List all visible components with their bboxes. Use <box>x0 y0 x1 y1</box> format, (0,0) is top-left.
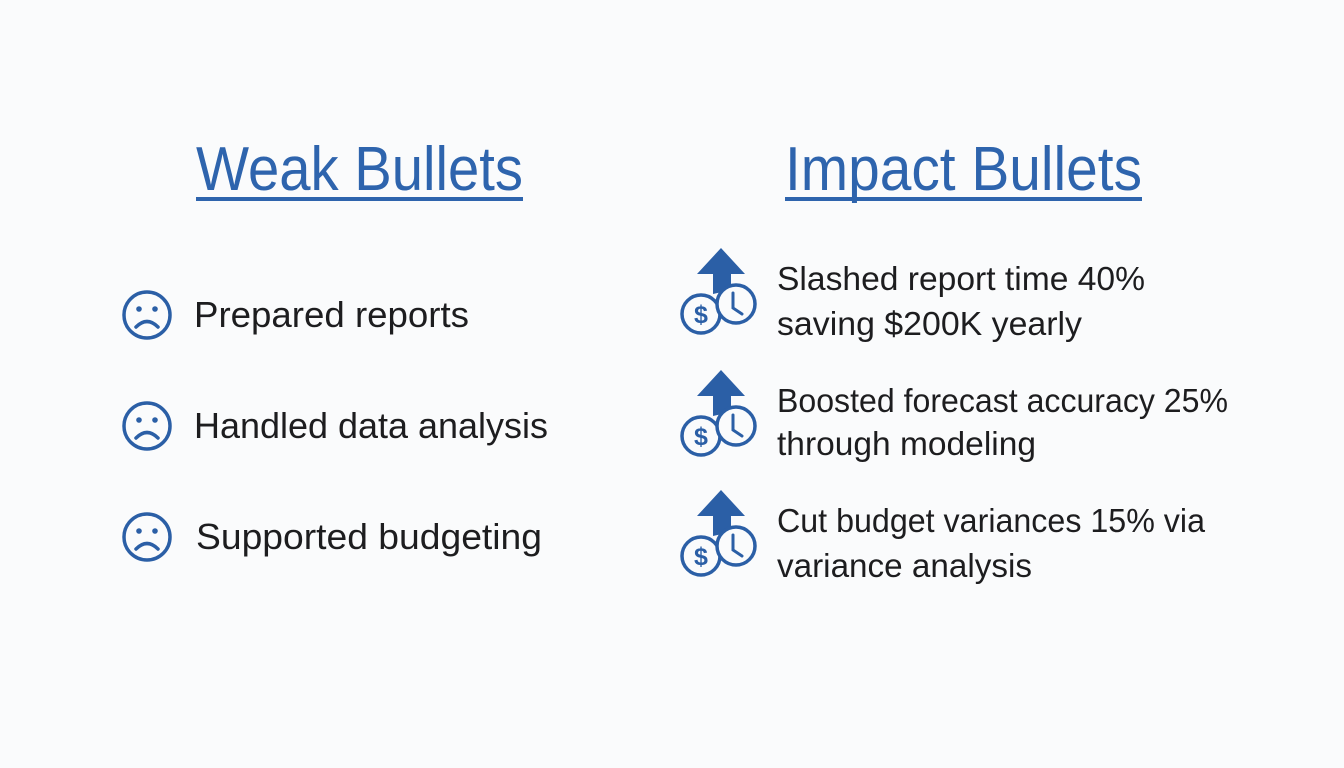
impact bullet 1: saving $200K yearly <box>777 305 1083 342</box>
impact bullet 2: Boosted forecast accuracy 25% <box>777 382 1228 419</box>
impact bullet 3: variance analysis <box>777 547 1032 584</box>
impact bullet 3: Cut budget variances 15% via <box>777 502 1206 539</box>
weak bullet 3: Supported budgeting <box>196 516 542 557</box>
impact bullet 2: through modeling <box>777 425 1036 462</box>
impact bullet 2 <box>682 370 1228 462</box>
impact bullet 3 <box>682 490 1206 584</box>
impact bullet 1: Slashed report time 40% <box>777 260 1145 297</box>
title: Impact Bullets: Impact Bullets <box>785 135 1142 204</box>
weak bullet 2: Handled data analysis <box>194 405 548 446</box>
title: Weak Bullets: Weak Bullets <box>196 135 523 204</box>
weak bullet 1: Prepared reports <box>194 294 469 335</box>
weak bullet 1 <box>124 292 469 338</box>
impact bullet 1 <box>682 248 1145 342</box>
